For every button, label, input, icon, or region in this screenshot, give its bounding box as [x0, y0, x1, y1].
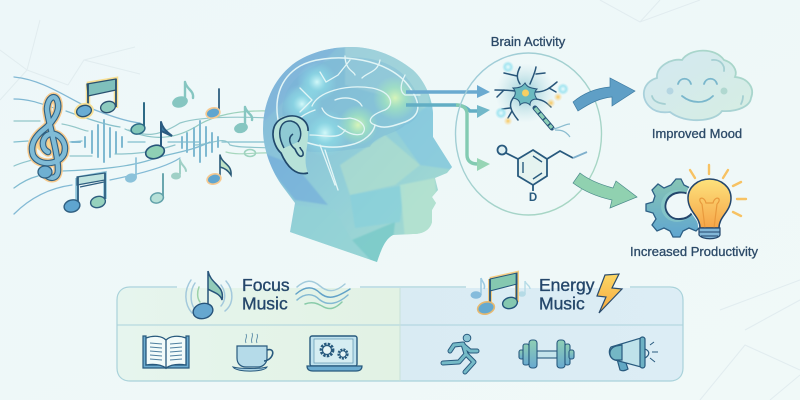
sound waves and staff lines	[14, 77, 270, 214]
icon: runner	[443, 334, 477, 372]
icon: lightning bolt	[597, 274, 622, 313]
icon: focus music note	[186, 271, 232, 321]
panel: energy music	[400, 273, 683, 381]
icon: megaphone	[609, 337, 658, 371]
icon: open book	[143, 336, 189, 368]
energy music heading: Energy	[539, 275, 595, 295]
energy music heading: Music	[539, 294, 585, 314]
icon: treble clef	[32, 97, 65, 178]
icon: molecule: D	[529, 192, 537, 204]
focus music heading: Music	[242, 294, 288, 314]
arrow to increased productivity	[573, 173, 637, 208]
icon: neuron	[495, 61, 570, 137]
icon: molecule	[498, 146, 587, 204]
icon: dumbbell	[519, 340, 574, 368]
icon: smiling cloud	[644, 51, 752, 120]
increased productivity label: Increased Productivity	[630, 244, 758, 259]
activity circle	[456, 53, 602, 215]
brain activity heading: Brain Activity	[491, 34, 566, 49]
icon: beamed note top	[74, 79, 117, 119]
improved mood label: Improved Mood	[652, 126, 742, 141]
icon: small music notes	[124, 82, 255, 205]
brain shape and glow	[277, 56, 420, 190]
focus music heading: Focus	[242, 275, 290, 295]
icon: gear and light bulb	[646, 165, 746, 239]
icon: ear	[273, 115, 308, 174]
head silhouette with brain	[263, 47, 452, 262]
arrow to improved mood	[573, 78, 635, 111]
icon: laptop with gears	[307, 336, 362, 371]
icon: coffee cup	[233, 333, 273, 371]
icon: calm waves	[296, 281, 350, 309]
equalizer bars	[72, 120, 218, 162]
pathway arrows from brain	[406, 85, 490, 171]
icon: energy music notes	[470, 273, 530, 316]
icon: beamed note bottom	[63, 173, 107, 214]
panel: focus music	[117, 271, 400, 381]
